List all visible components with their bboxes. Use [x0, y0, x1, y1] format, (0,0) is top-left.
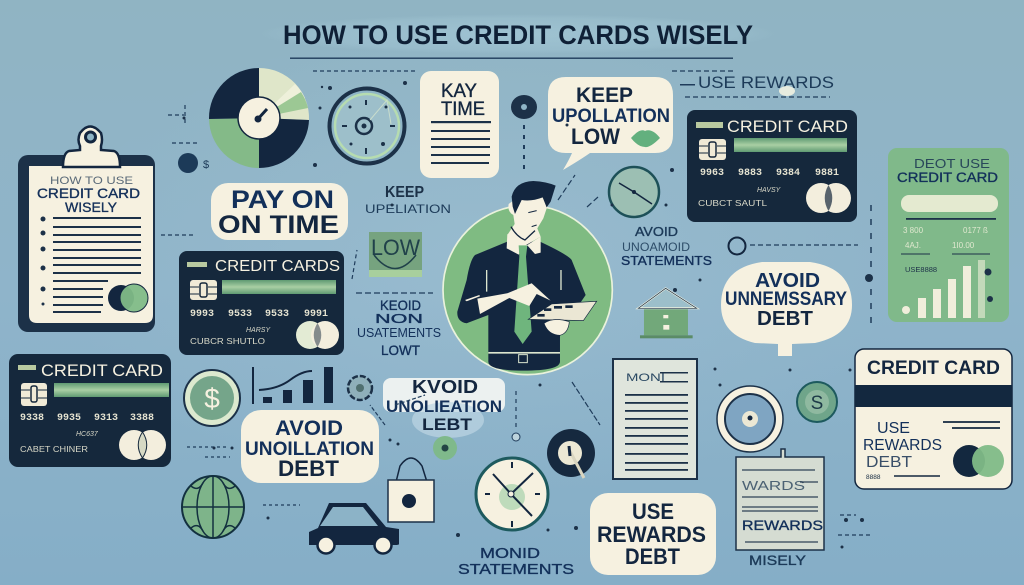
panel: kay time note: KAY [441, 81, 477, 102]
panel: credit card bottom left: 9338 [20, 413, 44, 424]
icon: ring with dashed line [728, 205, 873, 330]
icon: small coin left [178, 153, 209, 173]
panel: credit card bottom right: USE [877, 420, 910, 437]
panel: credit cards middle left: CUBCR SHUTLO [190, 337, 265, 346]
panel: credit card top right: 9963 [700, 168, 724, 179]
panel: credit card top right [687, 110, 857, 222]
torso [457, 242, 586, 371]
text: use rewards [672, 71, 834, 97]
panel: credit card bottom left: 9935 [57, 413, 81, 424]
icon: dashed pin line [512, 391, 520, 441]
icon: low gauge box: LOW [371, 235, 420, 260]
panel: monthly statement document: MONI [626, 372, 665, 384]
panel: use rewards debt [590, 493, 716, 575]
panel: keep utilization low speech bubble [548, 77, 673, 170]
text: keep upeliation: KEEP [385, 184, 424, 201]
panel: pay on time: PAY ON [231, 186, 334, 214]
text: keoid non usatements lowt: LOWT [381, 342, 420, 358]
icon: small gauge [609, 167, 659, 217]
panel: use rewards debt: REWARDS [597, 522, 706, 547]
chart: rising bars [252, 367, 333, 404]
panel: credit card top right: CUBCT SAUTL [698, 199, 768, 208]
panel: avoid unnecessary debt: UNNEMSSARY [725, 289, 847, 310]
panel: kvoid unoliation lebt: UNOLIEATION [386, 397, 502, 416]
card chip [21, 383, 47, 406]
forearm and hand [465, 283, 551, 314]
panel: green credit card with bars: 0177 ß [963, 226, 988, 235]
neck and face [507, 193, 548, 247]
chart: pie gauge [209, 68, 309, 168]
clipboard heading: HOW TO USE [50, 175, 133, 187]
tie [514, 245, 532, 344]
text: avoid statements: STATEMENTS [621, 253, 712, 268]
text: avoid statements: AVOID [635, 224, 678, 239]
green circle [443, 205, 612, 375]
panel: credit cards middle left: 9533 [265, 309, 289, 320]
belt [488, 352, 560, 363]
panel: green credit card with bars: 3 800 [903, 226, 924, 235]
panel: rewards document: REWARDS [742, 517, 823, 533]
card logo [953, 445, 1004, 477]
panel: clipboard checklist [18, 126, 155, 332]
text: use rewards: USE REWARDS [698, 73, 834, 92]
panel: keep utilization low speech bubble: KEEP [576, 84, 633, 107]
collar [507, 234, 541, 255]
panel: rewards document [736, 449, 824, 550]
clipboard heading: WISELY [65, 199, 118, 215]
panel: credit card bottom left: CABET CHINER [20, 445, 88, 454]
panel: kay time note: TIME [441, 99, 485, 120]
title: HOW TO USE CREDIT CARDS WISELY [283, 20, 753, 50]
text: avoid statements: UNOAMOID [622, 240, 690, 254]
panel: avoid unoillation debt: AVOID [275, 417, 343, 440]
panel: green credit card with bars: CREDIT CARD [897, 170, 998, 185]
panel: green credit card with bars: 1I0.00 [952, 241, 975, 250]
panel: credit card bottom right [855, 349, 1012, 489]
panel: credit cards middle left: 9533 [228, 309, 252, 320]
text: monid statements: STATEMENTS [458, 561, 574, 578]
icon: low gauge box [369, 232, 422, 277]
card logo [119, 430, 166, 460]
text: monid statements: MONID [480, 545, 540, 562]
clipboard clip [63, 126, 120, 167]
panel: pay on time: ON TIME [218, 211, 339, 239]
panel: credit card top right: HAVSY [757, 187, 782, 194]
icon: globe [182, 476, 244, 538]
card logo [296, 321, 339, 349]
icon: dollar coin [184, 370, 240, 426]
panel: kvoid unoliation lebt: LEBT [422, 415, 473, 434]
text: keoid non usatements lowt: USATEMENTS [357, 326, 441, 340]
panel: credit cards middle left: CREDIT CARDS [215, 258, 340, 275]
text: monid statements [458, 545, 574, 578]
panel: credit card bottom right: REWARDS [863, 437, 942, 454]
icon: green lips [631, 130, 660, 147]
panel: green credit card with bars: USE8888 [905, 265, 937, 274]
sleeve seams [487, 270, 561, 292]
clipboard heading [37, 175, 140, 215]
panel: green credit card with bars: 4AJ. [905, 241, 921, 250]
text: keoid non usatements lowt [356, 293, 441, 358]
icon: small dial [547, 429, 595, 478]
icon: small gear [348, 376, 372, 400]
card logo [806, 183, 851, 213]
text: keep upeliation: UPELIATION [365, 202, 451, 216]
panel: credit cards middle left [179, 251, 344, 355]
panel: use rewards debt: DEBT [625, 544, 681, 569]
panel: credit cards middle left: 9993 [190, 309, 214, 320]
panel: keep utilization low speech bubble: LOW [571, 124, 620, 149]
panel: credit card bottom right: 8888 [866, 474, 881, 481]
panel: pay on time [211, 183, 348, 240]
panel: avoid unoillation debt: DEBT [278, 456, 340, 481]
icon: wall clock dial [330, 88, 404, 164]
panel: kay time note [420, 71, 499, 178]
panel: kvoid unoliation lebt [383, 377, 505, 438]
icon: dollar coin: $ [204, 383, 220, 414]
icon: magnifier target [717, 386, 783, 452]
icon: small teal badge [511, 95, 537, 175]
illustration: person with tablet [443, 181, 612, 375]
overlap logo [108, 284, 148, 312]
panel: credit card top right: CREDIT CARD [727, 117, 848, 136]
panel: credit card bottom left: CREDIT CARD [41, 362, 163, 380]
panel: credit card top right: 9881 [815, 168, 839, 179]
card chip [190, 280, 217, 300]
panel: avoid unoillation debt [241, 410, 379, 483]
holding hand [544, 319, 569, 335]
icon: coin s [797, 382, 837, 422]
panel: credit card bottom left: 9313 [94, 413, 118, 424]
panel: monthly statement document [613, 359, 697, 479]
icon: small coin left: $ [203, 159, 209, 171]
panel: use rewards debt: USE [632, 499, 674, 524]
panel: avoid unnecessary debt: DEBT [757, 308, 813, 330]
panel: credit card bottom left: 3388 [130, 413, 154, 424]
bar chart [902, 260, 985, 318]
panel: credit card top right: 9384 [776, 168, 800, 179]
text: wisely: MISELY [749, 552, 807, 568]
panel: green credit card with bars [888, 148, 1009, 322]
tablet [528, 301, 597, 321]
text: keoid non usatements lowt: KEOID [380, 297, 421, 313]
panel: credit card bottom right: DEBT [866, 454, 912, 471]
text: keoid non usatements lowt: NON [375, 311, 423, 326]
scattered marks [161, 71, 870, 535]
icon: coin s: S [811, 393, 823, 414]
panel: credit cards middle left: 9991 [304, 309, 328, 320]
panel: avoid unoillation debt: UNOILLATION [245, 439, 374, 460]
panel: avoid unnecessary debt [721, 262, 852, 356]
text: keep upeliation [365, 184, 451, 216]
panel: avoid unnecessary debt: AVOID [755, 270, 820, 292]
card chip [699, 139, 726, 160]
panel: keep utilization low speech bubble: UPOLLATION [552, 106, 670, 127]
panel: credit card bottom left [9, 354, 171, 467]
clipboard heading: CREDIT CARD [37, 185, 140, 201]
panel: credit card top right: 9883 [738, 168, 762, 179]
panel: credit cards middle left: HARSY [246, 327, 271, 334]
checklist lines [40, 216, 141, 313]
icon: car [309, 503, 399, 554]
panel: rewards document: WARDS [742, 478, 805, 493]
hair [512, 181, 556, 214]
icon: bank building [638, 288, 697, 338]
icon: green token [433, 436, 457, 460]
panel: green credit card with bars: DEOT USE [914, 156, 990, 171]
icon: analog clock [476, 458, 548, 530]
panel: credit card bottom left: HC637 [76, 431, 99, 438]
panel: kvoid unoliation lebt: KVOID [412, 377, 478, 397]
icon: shopping bag [388, 458, 434, 522]
text: avoid statements [621, 224, 712, 268]
panel: credit card bottom right: CREDIT CARD [867, 358, 1000, 379]
